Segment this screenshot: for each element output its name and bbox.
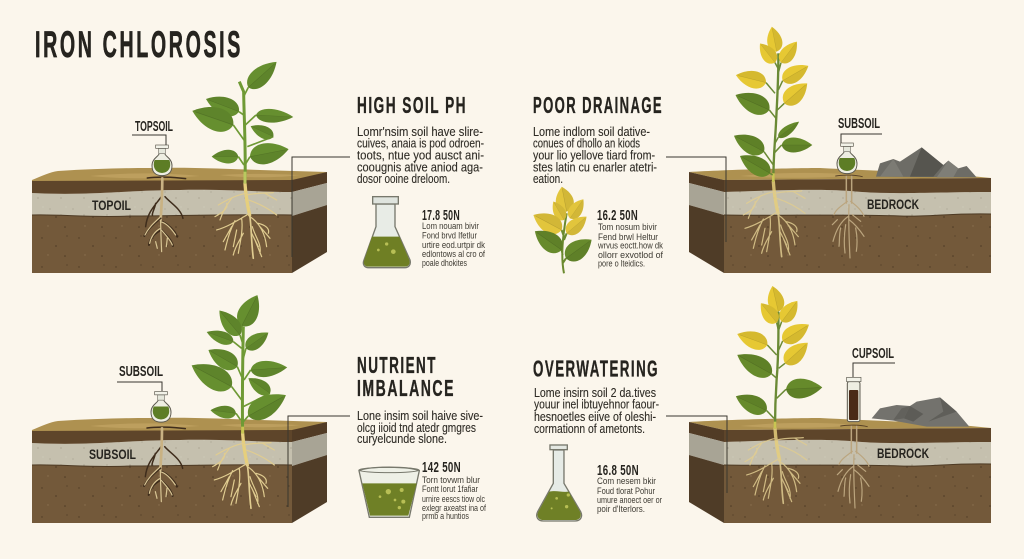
soil cross-section	[32, 418, 327, 523]
heading: IMBALANCE	[357, 375, 455, 401]
body text	[534, 385, 659, 436]
statistic: urnire eescs tiow olc	[422, 494, 485, 504]
small roots	[144, 427, 185, 502]
layer label: TOPOIL	[92, 198, 131, 213]
soil cross-section	[689, 168, 991, 273]
vial leader line	[117, 382, 162, 391]
layer label: SUBSOIL	[89, 447, 136, 462]
body text: cuives, anaia is pod odroen-	[357, 136, 484, 150]
connector line	[292, 157, 350, 257]
vial label: CUPSOIL	[852, 346, 894, 362]
heading: POOR DRAINAGE	[533, 92, 663, 118]
body text: cormationn of ametonts.	[534, 421, 645, 436]
body text: Lome indlom soil dative-	[533, 124, 650, 139]
icon: yellowing sprig	[529, 185, 597, 273]
statistic: 17.8 50N	[422, 207, 460, 224]
icon: test vial	[151, 392, 171, 422]
connector line	[666, 416, 727, 493]
panel: overwatering text	[533, 356, 662, 521]
body text: olcg iioid tnd atedr gmgres	[357, 420, 476, 435]
statistic	[422, 459, 486, 521]
vial leader line	[841, 134, 882, 143]
statistic: Torn tovwm blur	[422, 475, 480, 485]
body text: your lio yellove tiard from-	[533, 148, 655, 162]
heading: HIGH SOIL PH	[357, 92, 467, 118]
body text: Lomr'nsim soil have slire-	[357, 124, 483, 139]
title: IRON CHLOROSIS	[35, 24, 243, 65]
yellowing plant	[730, 25, 813, 257]
body text	[357, 408, 483, 446]
vial leader line	[853, 363, 895, 377]
statistic	[597, 207, 663, 268]
statistic: umure anoect oer or	[597, 495, 662, 505]
soil cross-section	[689, 418, 991, 523]
body text: coougnis ative aniod aga-	[357, 160, 483, 174]
green plant	[189, 55, 294, 258]
heading: OVERWATERING	[533, 356, 659, 382]
statistic: Lom nouam bivir	[422, 221, 479, 231]
roots	[837, 425, 869, 508]
body text: hesnoetles eiive of oleshi-	[534, 409, 656, 424]
panel: high soil pH soil diagram	[32, 55, 350, 273]
heading	[357, 352, 455, 401]
panel: nutrient imbalance text	[357, 352, 486, 521]
statistic: Tom nosum bivir	[598, 222, 657, 232]
statistic: 16.8 50N	[597, 462, 639, 479]
icon: test vial	[837, 143, 857, 174]
statistic: edlontows al cro of	[422, 249, 485, 259]
body text	[533, 124, 657, 186]
statistic: Com nesem bkir	[597, 476, 656, 486]
body text: conues of dhollo an kiods	[533, 136, 640, 150]
panel: overwatering soil diagram	[666, 284, 991, 523]
connector line	[288, 416, 350, 507]
vial label: SUBSOIL	[838, 116, 880, 132]
rock pile	[872, 397, 969, 427]
statistic: 142 50N	[422, 459, 461, 476]
yellowing plant	[732, 284, 823, 503]
layer label: BEDROCK	[877, 446, 929, 461]
body text: stes latin cu enarler atetri-	[533, 160, 657, 174]
body text: eation.	[533, 171, 563, 186]
body text: youur inel ibtuyehnor faour-	[534, 396, 659, 412]
small roots	[144, 177, 186, 252]
icon: beaker	[359, 467, 419, 517]
panel: poor drainage soil diagram	[666, 25, 991, 273]
statistic: urtire eod.urtpir dk	[422, 240, 485, 250]
statistic: poir d'Iterlors.	[597, 504, 645, 514]
vial leader line	[132, 135, 166, 145]
layer label: BEDROCK	[867, 197, 919, 212]
panel: poor drainage text	[529, 92, 663, 273]
green plant	[186, 291, 291, 508]
icon: test vial	[152, 145, 172, 176]
vial label: SUBSOIL	[119, 364, 163, 380]
statistic	[422, 207, 485, 268]
body text: toots, ntue yod ausct ani-	[357, 148, 484, 162]
statistic: Fond brvd Ifetlur	[422, 230, 477, 240]
statistic: poale dhokites	[422, 258, 467, 268]
icon: long-neck flask	[537, 445, 582, 521]
statistic: Fontt lorut 1fafiar	[422, 484, 478, 494]
statistic: 16.2 50N	[597, 207, 638, 224]
heading: NUTRIENT	[357, 352, 437, 378]
body text: Lome insirn soil 2 da.tives	[534, 385, 656, 400]
rock pile	[876, 147, 977, 177]
soil cross-section	[32, 168, 327, 273]
statistic: prmb a huntios	[422, 511, 469, 521]
body text: Lone insim soil haive sive-	[357, 408, 483, 423]
statistic: ollorr exvotlod of	[598, 250, 663, 260]
panel: high soil pH text	[357, 92, 485, 268]
panel: nutrient imbalance soil diagram	[32, 291, 350, 523]
roots	[832, 175, 864, 258]
statistic	[597, 462, 662, 514]
body text: curyelcunde slone.	[357, 431, 447, 446]
body text	[357, 124, 484, 186]
icon: soil vial	[847, 377, 861, 422]
statistic: pore o lteidics.	[598, 258, 645, 268]
connector line	[666, 157, 726, 242]
statistic: exlegr axeatst ina of	[422, 503, 486, 513]
statistic: Foud tlorat Pohur	[597, 486, 655, 496]
statistic: wrvus eoctt.how dk	[597, 240, 663, 250]
vial label: TOPSOIL	[135, 119, 173, 135]
statistic: Fend brwl Heltur	[598, 232, 658, 242]
body text: dosor ooine dreloom.	[357, 171, 450, 186]
icon: erlenmeyer flask	[363, 197, 410, 268]
